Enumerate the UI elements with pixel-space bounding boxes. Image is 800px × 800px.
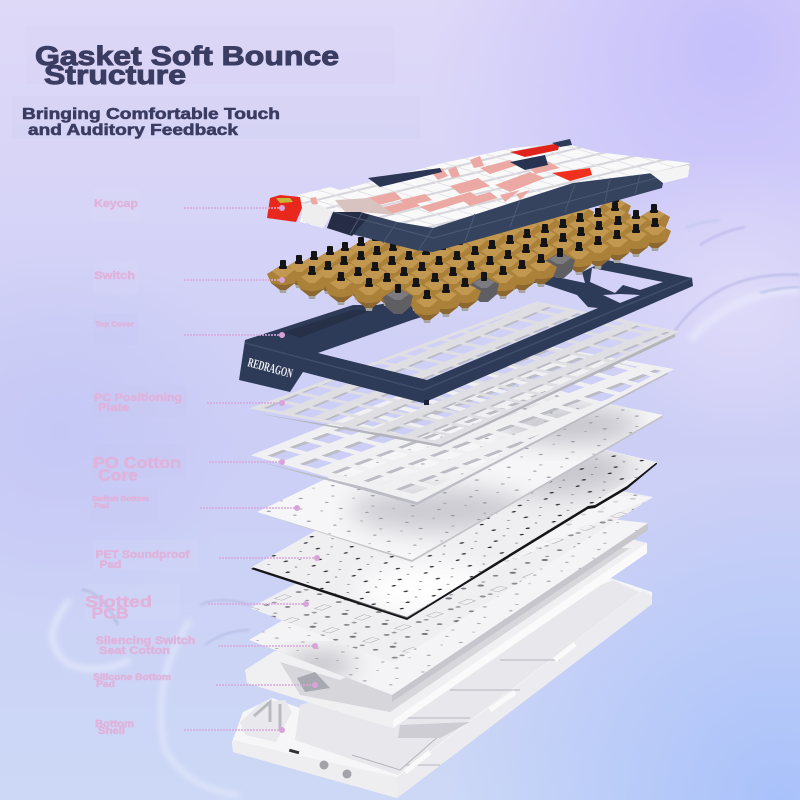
exploded keyboard	[232, 139, 693, 798]
label: PET Soundproof Pad	[93, 540, 320, 571]
label: Silicone Bottom Pad	[93, 672, 318, 689]
label: Silencing Switch Seat Cotton	[96, 635, 318, 657]
bottom shell	[232, 578, 652, 798]
label: Switch Bottom Pad: Switch Bottom	[92, 494, 149, 503]
label: Keycap: Keycap	[94, 198, 138, 210]
silencing switch seat cotton	[249, 505, 648, 702]
subtitle: Bringing Comfortable Touch	[22, 106, 280, 123]
label: Bottom Shell: Bottom	[95, 719, 134, 730]
label: Slotted PCB	[85, 584, 309, 622]
logo: Redragon: REDRAGON	[246, 354, 295, 381]
PC positioning plate	[255, 303, 675, 447]
subtitle	[12, 96, 420, 139]
switches	[267, 193, 671, 323]
label: PO Cotton Core: Core	[98, 468, 138, 484]
red escape keycap	[267, 195, 302, 222]
label: Bottom Shell: Shell	[98, 726, 125, 737]
label: Switch Bottom Pad	[90, 487, 300, 523]
label: PC Positioning Plate: Plate	[98, 402, 129, 414]
label: Slotted PCB: PCB	[92, 606, 128, 622]
title block: Structure	[44, 60, 186, 90]
label: Switch: Switch	[94, 270, 135, 282]
label: Switch Bottom Pad: Pad	[94, 501, 109, 510]
label: PO Cotton Core	[92, 444, 285, 484]
red keycaps	[510, 143, 560, 157]
label: Silicone Bottom Pad: Pad	[96, 679, 115, 689]
label: Bottom Shell	[95, 719, 285, 737]
label: Slotted PCB: Slotted	[85, 594, 152, 611]
label: PET Soundproof Pad: PET Soundproof	[96, 549, 190, 561]
label: Silicone Bottom Pad: Silicone Bottom	[93, 672, 171, 682]
title block	[26, 26, 395, 90]
label: Silencing Switch Seat Cotton: Seat Cotton	[99, 645, 170, 657]
PET soundproof pad	[251, 450, 657, 620]
switch bottom pad	[257, 385, 663, 562]
PO cotton core	[257, 345, 668, 505]
pink keycaps	[310, 156, 560, 214]
dark back row keycaps	[368, 168, 442, 187]
subtitle: and Auditory Feedback	[28, 122, 238, 139]
label: PC Positioning Plate	[92, 385, 285, 417]
label: PET Soundproof Pad: Pad	[100, 559, 122, 571]
label: PO Cotton Core: PO Cotton	[93, 455, 181, 472]
slotted PCB	[250, 470, 653, 663]
label: Switch	[93, 262, 285, 294]
label: Silencing Switch Seat Cotton: Silencing Switch	[96, 635, 196, 647]
label: PC Positioning Plate: PC Positioning	[94, 392, 182, 404]
keycaps	[267, 139, 690, 252]
silicone bottom pad tray	[245, 538, 647, 728]
top cover	[239, 260, 693, 405]
label: Top Cover: Top Cover	[95, 320, 134, 328]
label: Top Cover	[93, 314, 285, 345]
label: Keycap	[93, 190, 285, 221]
title: Gasket Soft Bounce	[35, 41, 339, 71]
